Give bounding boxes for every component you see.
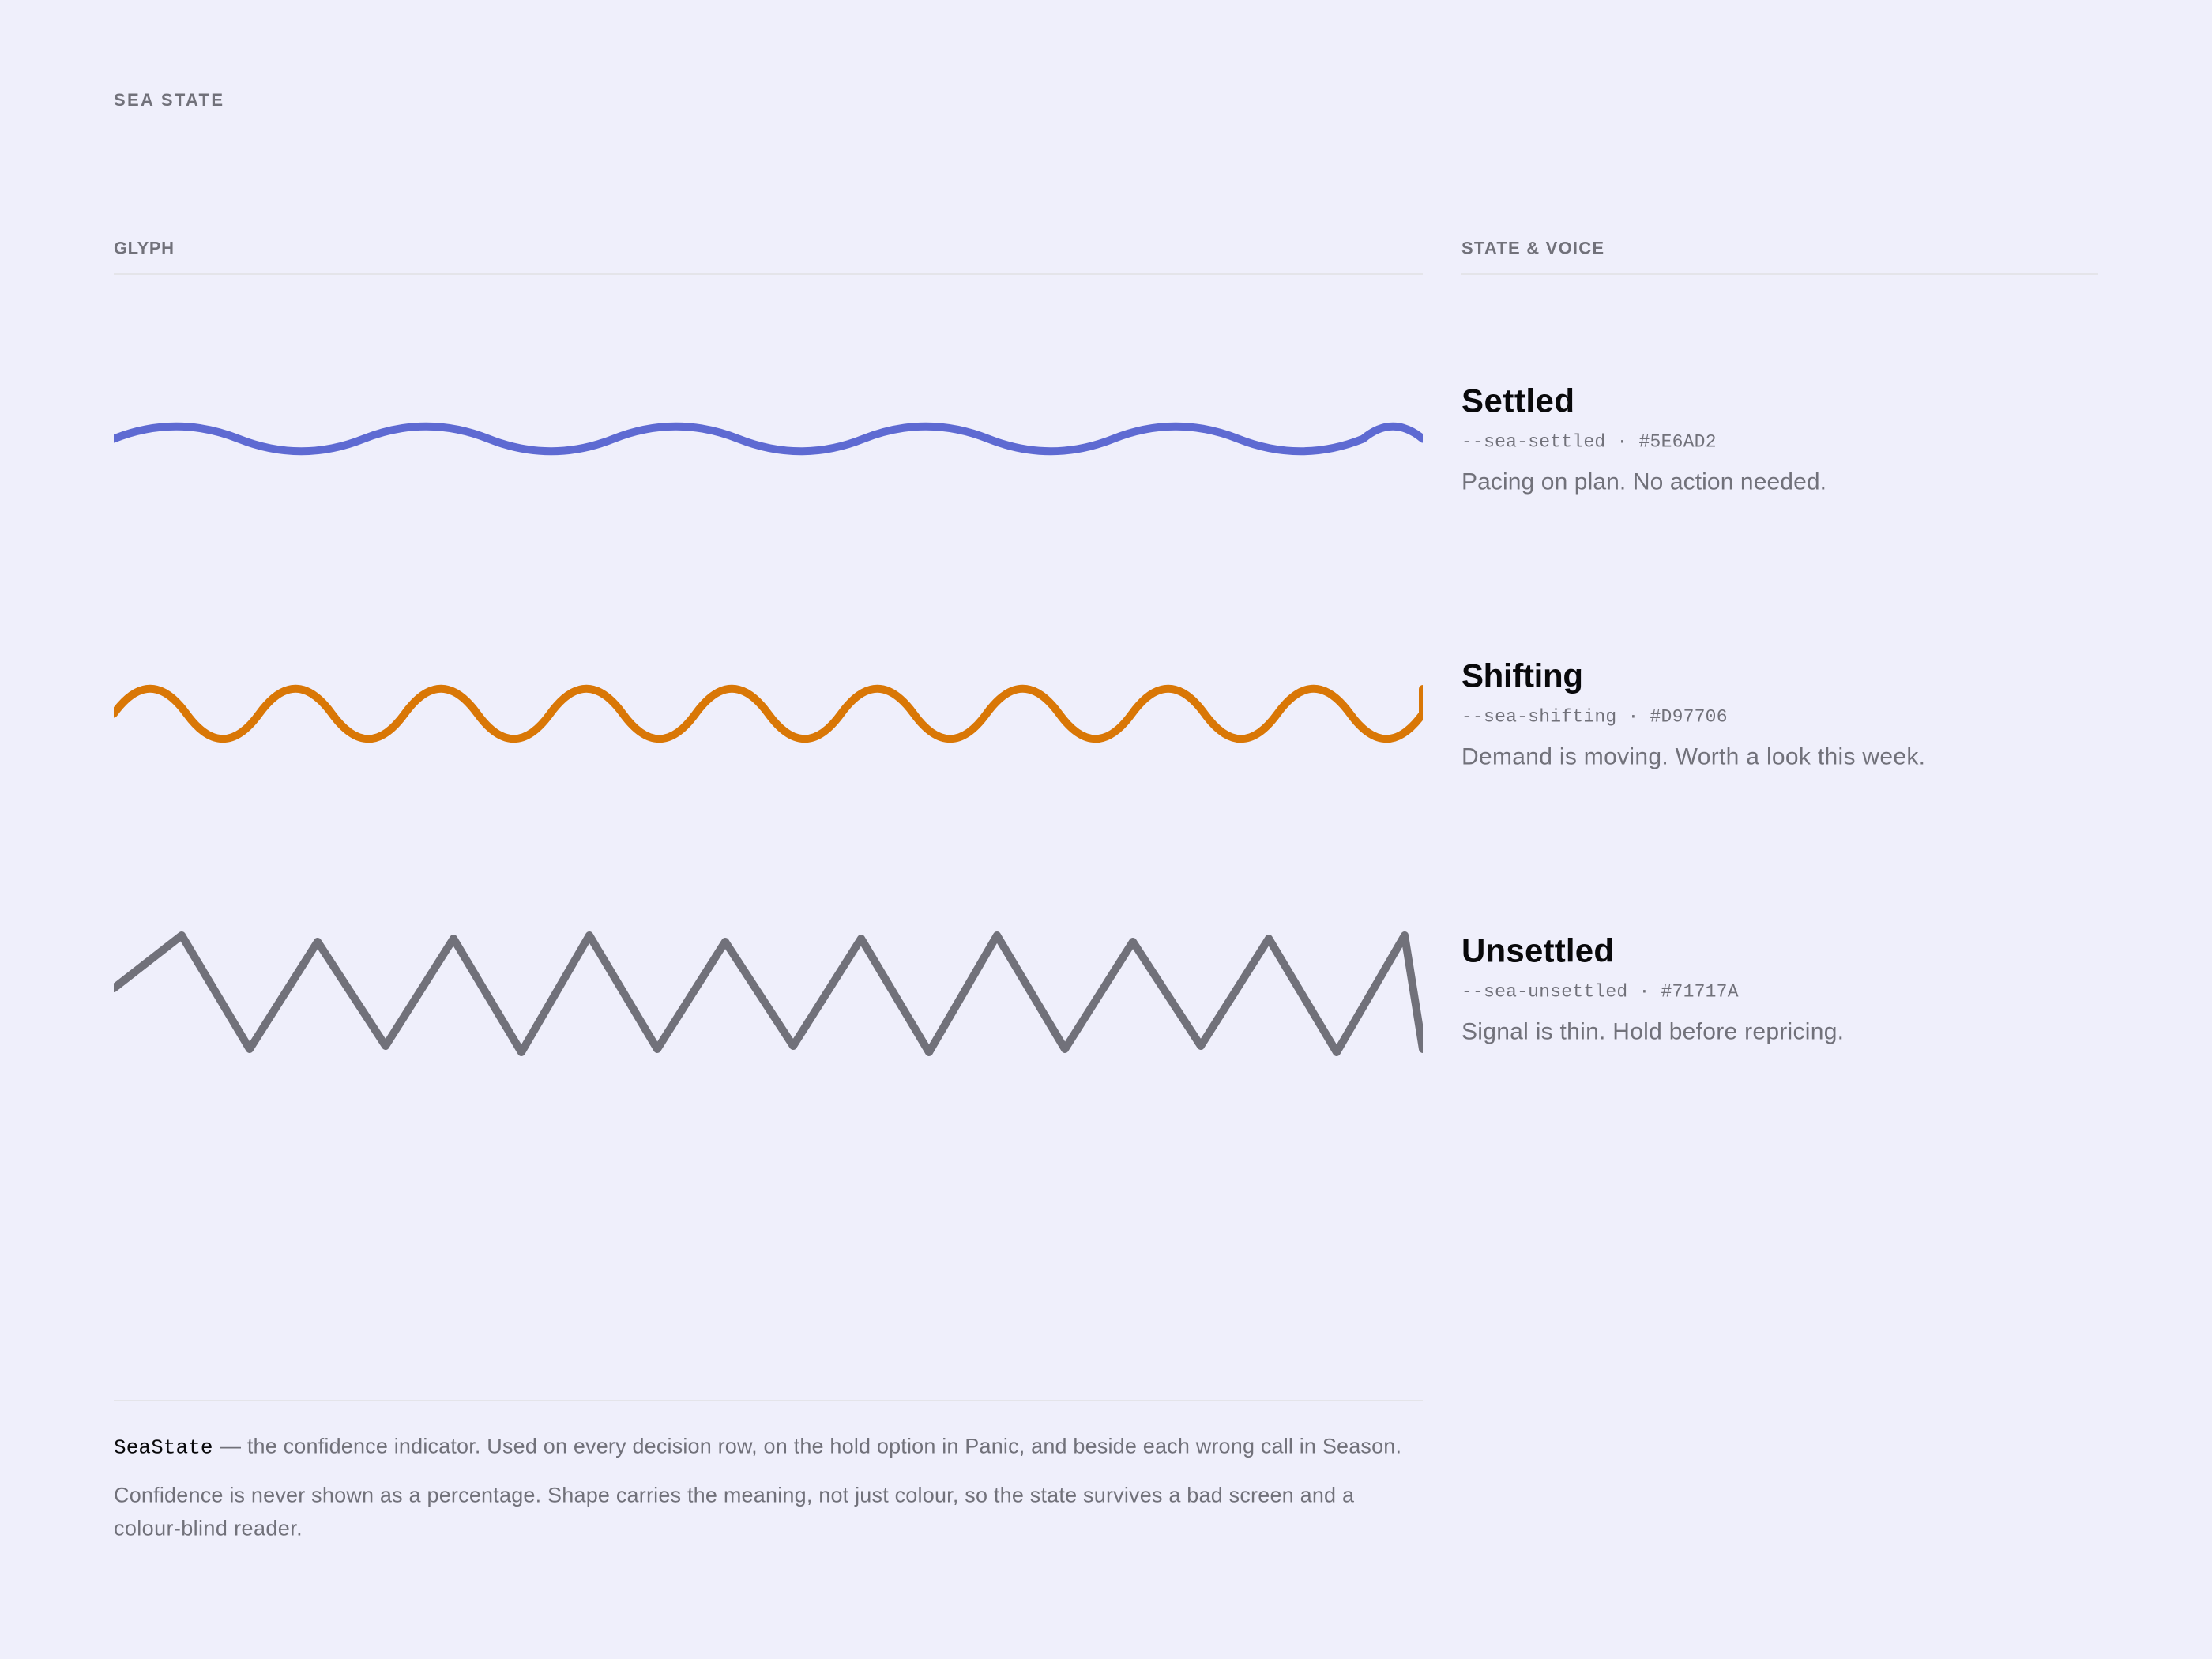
column heading: state and voice: STATE & VOICE bbox=[1462, 239, 1604, 258]
state text: settled: --sea-settled · #5E6AD2 bbox=[1462, 432, 1716, 453]
state text: settled bbox=[1462, 382, 1826, 495]
footer note: SeaState bbox=[114, 1435, 213, 1459]
title: sea state: SEA STATE bbox=[114, 90, 223, 110]
state text: shifting: Demand is moving. Worth a look this week. bbox=[1462, 743, 1925, 769]
footer note: — the confidence indicator. Used on every decision row, on the hold option in Panic, and beside each wrong call in Season. bbox=[220, 1434, 1401, 1458]
state text: unsettled: --sea-unsettled · #71717A bbox=[1462, 982, 1739, 1003]
footer note: colour-blind reader. bbox=[114, 1516, 303, 1540]
state text: shifting bbox=[1462, 657, 1925, 769]
state text: shifting: Shifting bbox=[1462, 657, 1583, 694]
wave glyph: shifting bbox=[114, 689, 1423, 739]
state text: unsettled: Signal is thin. Hold before repricing. bbox=[1462, 1018, 1844, 1044]
column heading: glyph: GLYPH bbox=[114, 239, 174, 258]
footer note: Confidence is never shown as a percentage. Shape carries the meaning, not just colour, so the state survives a bad screen and a bbox=[114, 1484, 1355, 1507]
state text: settled: Settled bbox=[1462, 382, 1574, 419]
footer note bbox=[114, 1400, 1423, 1540]
state text: unsettled bbox=[1462, 932, 1844, 1044]
wave glyph: settled bbox=[114, 427, 1423, 451]
state text: shifting: --sea-shifting · #D97706 bbox=[1462, 707, 1727, 728]
state text: unsettled: Unsettled bbox=[1462, 932, 1614, 969]
zigzag glyph: unsettled bbox=[114, 935, 1423, 1052]
state text: settled: Pacing on plan. No action needed. bbox=[1462, 468, 1826, 495]
